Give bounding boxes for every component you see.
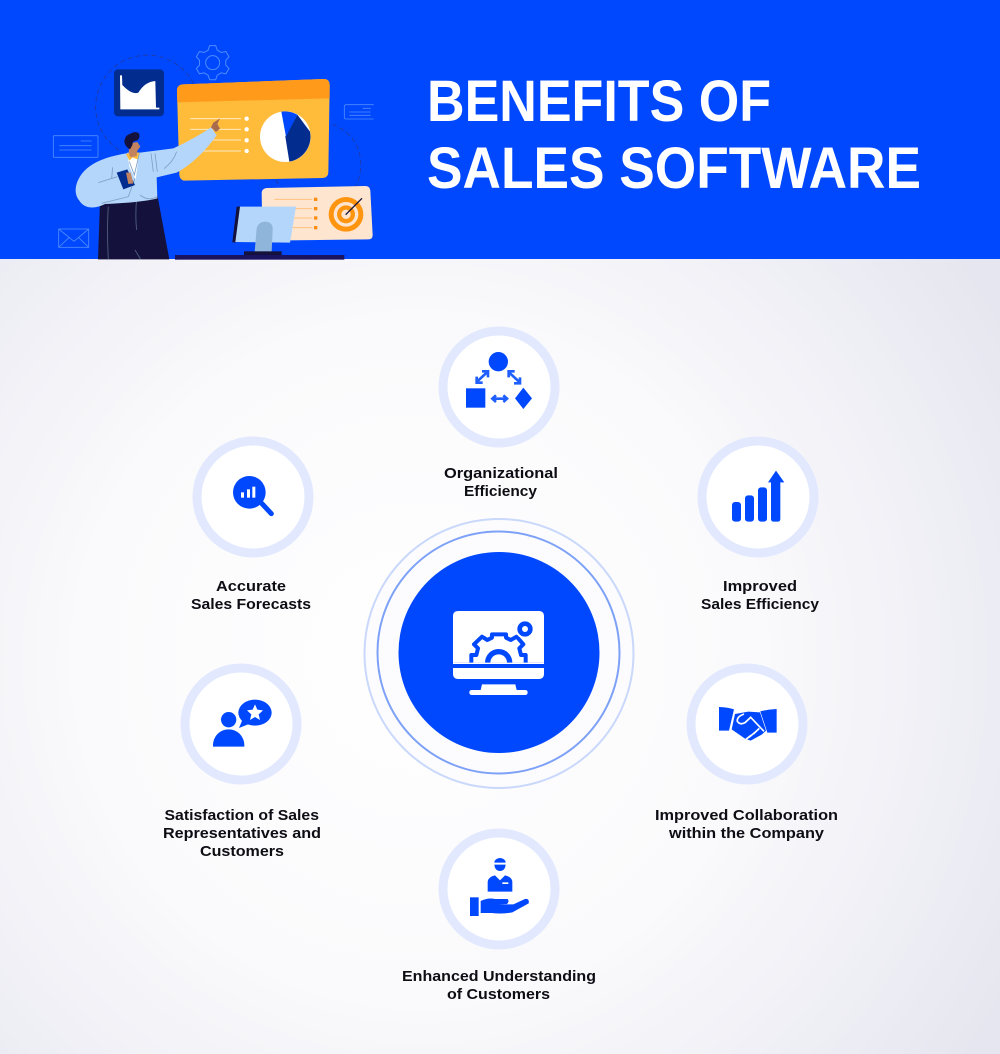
center hub xyxy=(364,519,634,788)
label: Improved xyxy=(723,578,797,595)
label: Enhanced Understanding xyxy=(402,968,596,985)
benefit: understanding customers: of Customers xyxy=(447,986,550,1003)
icon: handshake xyxy=(719,707,777,741)
label: Accurate xyxy=(216,578,286,595)
illustration: presenter with dashboards xyxy=(53,46,374,260)
benefit: organizational efficiency: Efficiency xyxy=(464,483,538,500)
benefit: improved sales efficiency xyxy=(701,441,820,613)
icon ring xyxy=(197,441,309,553)
desk monitor xyxy=(175,207,344,260)
title: SALES SOFTWARE xyxy=(427,136,921,201)
benefit: satisfaction: Customers xyxy=(200,843,284,860)
icon ring xyxy=(691,668,803,780)
presenter xyxy=(76,118,220,259)
chart tile xyxy=(114,69,164,116)
icon: shapes with arrows xyxy=(466,352,532,409)
line-art document left xyxy=(53,136,98,157)
icon ring xyxy=(185,668,297,780)
label: Organizational xyxy=(444,465,558,482)
icon: rising bars with arrow xyxy=(732,471,784,522)
label: Satisfaction of Sales xyxy=(164,807,319,824)
target card xyxy=(262,186,373,241)
pie chart xyxy=(260,111,311,162)
benefit: accurate sales forecasts xyxy=(191,441,311,613)
title xyxy=(427,69,921,201)
icon: magnifier with bars xyxy=(233,476,271,514)
icon ring xyxy=(443,833,555,945)
label: Improved Collaboration xyxy=(655,807,838,824)
icon ring xyxy=(443,331,555,443)
benefit: satisfaction xyxy=(163,668,321,860)
dashed orbit lines xyxy=(96,55,361,186)
benefit: satisfaction: Representatives and xyxy=(163,825,321,842)
benefit: accurate sales forecasts: Sales Forecasts xyxy=(191,596,311,613)
benefit: improved sales efficiency: Sales Efficiency xyxy=(701,596,820,613)
benefit: improved collaboration xyxy=(655,668,838,842)
line-art envelope xyxy=(59,229,89,247)
gear outline xyxy=(196,46,229,80)
icon ring xyxy=(702,441,814,553)
icon: customer on open hand xyxy=(470,858,529,916)
header banner xyxy=(0,0,1000,259)
yellow dashboard panel xyxy=(177,79,330,181)
title: BENEFITS OF xyxy=(427,69,771,134)
benefit: improved collaboration: within the Company xyxy=(668,825,825,842)
icon: monitor with gear xyxy=(453,611,544,695)
line-art document right xyxy=(344,105,374,119)
icon: person with star bubble xyxy=(213,700,272,747)
target xyxy=(329,197,363,232)
benefit: understanding customers xyxy=(402,833,596,1003)
benefit: organizational efficiency xyxy=(443,331,558,500)
page background xyxy=(0,258,1000,1054)
